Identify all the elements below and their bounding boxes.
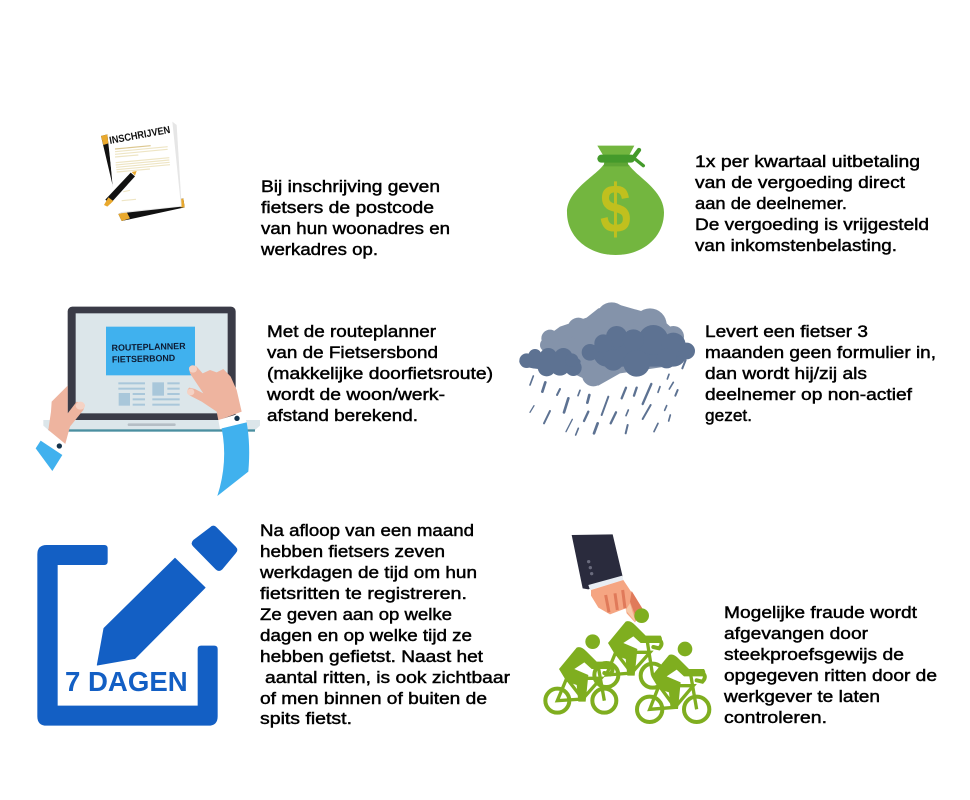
text: non-actief: dan wordt hij/zij als	[705, 365, 867, 383]
text: registratie: aantal ritten, is ook zichtbaar	[265, 669, 511, 687]
text: routeplanner	[266, 323, 493, 425]
text: non-actief: Levert een fietser 3	[705, 323, 868, 341]
eraser	[192, 526, 237, 571]
text: registratie	[259, 522, 511, 728]
text: non-actief: gezet.	[705, 407, 752, 425]
icon: rain cloud	[519, 302, 695, 435]
text: registratie: of men binnen of buiten de	[260, 690, 487, 708]
icon: laptop with hands	[36, 307, 260, 496]
right hand	[187, 365, 249, 496]
icon: pencil and frame	[37, 526, 237, 726]
text: inschrijving: van hun woonadres en	[261, 220, 450, 238]
cyclist: centre	[594, 621, 665, 688]
text: inschrijving	[260, 178, 450, 259]
icon: money bag	[567, 146, 664, 255]
text: fraude	[723, 604, 937, 727]
text: non-actief: deelnemer op non-actief	[705, 386, 912, 404]
text: routeplanner: wordt de woon/werk-	[266, 386, 445, 404]
text: registratie: fietsritten te registreren.	[260, 585, 467, 603]
cyclist: right	[637, 642, 709, 722]
text: registratie: dagen en op welke tijd ze	[260, 627, 472, 645]
laptop base	[43, 420, 260, 432]
text: inschrijving: fietsers de postcode	[261, 199, 434, 217]
text: non-actief: maanden geen formulier in,	[705, 344, 936, 362]
text: registratie: werkdagen de tijd om hun	[259, 564, 477, 582]
cyclist head: centre	[634, 608, 649, 623]
text: uitbetaling: 1x per kwartaal uitbetaling	[695, 153, 920, 171]
label: 7 dagen: 7 DAGEN	[65, 666, 188, 697]
text: fraude: werkgever te laten	[723, 688, 880, 706]
text: uitbetaling	[695, 153, 929, 255]
text: uitbetaling: van inkomstenbelasting.	[695, 237, 897, 255]
left hand	[36, 386, 85, 471]
text: uitbetaling: De vergoeding is vrijgesteld	[695, 216, 929, 234]
cyclist: left	[545, 634, 616, 713]
text: routeplanner: (makkelijke doorfietsroute)	[267, 365, 493, 383]
text: routeplanner: Met de routeplanner	[267, 323, 437, 341]
text: uitbetaling: aan de deelnemer.	[695, 195, 847, 213]
text: registratie: hebben fietsers zeven	[260, 543, 445, 561]
icon: money bag: $	[600, 171, 631, 247]
text: registratie: spits fietst.	[260, 710, 352, 728]
icon: registration document: INSCHRIJVEN	[109, 125, 171, 147]
text: non-actief	[705, 323, 936, 425]
text: fraude: opgegeven ritten door de	[724, 667, 937, 685]
text: registratie: Ze geven aan op welke	[260, 606, 452, 624]
text: routeplanner: van de Fietsersbond	[267, 344, 438, 362]
text: uitbetaling: van de vergoeding direct	[695, 174, 905, 192]
screen label: ROUTEPLANNER	[111, 341, 186, 353]
frame	[37, 545, 218, 726]
text: fraude: controleren.	[724, 709, 827, 727]
screen label	[111, 341, 187, 365]
text: inschrijving: werkadres op.	[260, 241, 378, 259]
icon: cyclists and pointing hand	[545, 534, 709, 722]
text: registratie: hebben gefietst. Naast het	[260, 648, 483, 666]
text: inschrijving: Bij inschrijving geven	[261, 178, 440, 196]
text: fraude: afgevangen door	[724, 625, 869, 643]
screen label: FIETSERBOND	[112, 353, 176, 365]
text: fraude: Mogelijke fraude wordt	[724, 604, 917, 622]
text: registratie: Na afloop van een maand	[260, 522, 474, 540]
icon: registration document	[101, 122, 185, 221]
pencil	[97, 558, 205, 665]
text: routeplanner: afstand berekend.	[267, 407, 418, 425]
text: fraude: steekproefsgewijs de	[724, 646, 904, 664]
pointing hand	[572, 534, 643, 622]
laptop screen	[68, 307, 236, 420]
